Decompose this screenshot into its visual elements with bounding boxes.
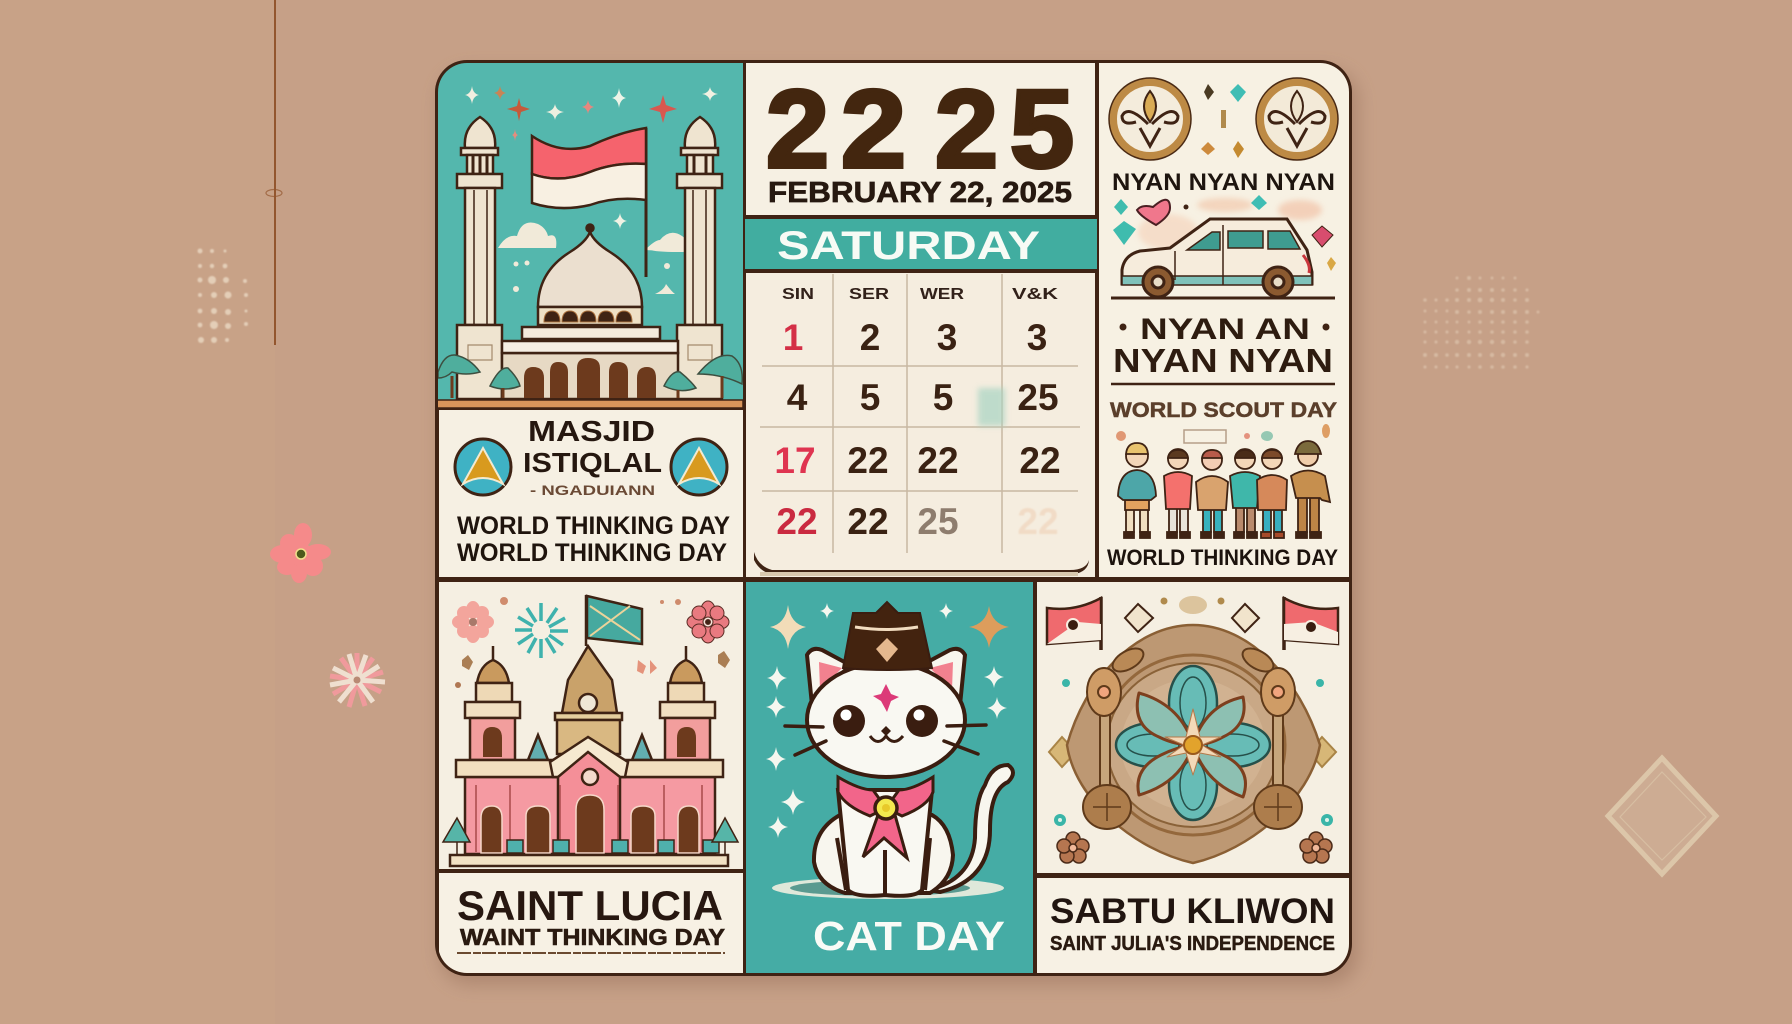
heading: Masjid: MASJID bbox=[528, 416, 655, 448]
icon: mosque dome and hall bbox=[502, 224, 678, 399]
panel: date header bbox=[746, 62, 1095, 215]
main hall bbox=[456, 737, 723, 854]
weekday labels: SER bbox=[849, 286, 890, 303]
icon: cathedral bbox=[443, 646, 738, 866]
day numbers: 2 bbox=[860, 317, 880, 358]
icon: corner flowers bbox=[1057, 832, 1332, 863]
hat bbox=[843, 602, 932, 670]
day numbers: 17 bbox=[774, 440, 816, 481]
clouds bbox=[498, 222, 702, 294]
teal pedestals bbox=[507, 840, 719, 853]
day numbers bbox=[774, 317, 1061, 542]
icon: left Saint Lucia badge bbox=[455, 439, 511, 495]
weekday labels: WER bbox=[920, 286, 965, 303]
big number 2225: 2 bbox=[935, 68, 998, 191]
panel: Masjid Istiqlal text bbox=[439, 410, 743, 577]
calendar sheet curl bbox=[754, 552, 1089, 576]
day numbers: 1 bbox=[783, 317, 803, 358]
confetti top bbox=[1201, 84, 1246, 158]
label: Cat Day: CAT DAY bbox=[813, 913, 1005, 959]
day numbers: 22 bbox=[847, 501, 889, 542]
icon: small ornaments bbox=[455, 597, 730, 688]
day numbers: 3 bbox=[937, 317, 957, 358]
ground line bbox=[1111, 296, 1335, 300]
icon: right minaret bbox=[677, 117, 722, 399]
left tower bbox=[465, 646, 520, 760]
centre clock tower bbox=[528, 646, 652, 760]
whiskers bbox=[785, 725, 986, 755]
weekday labels: SIN bbox=[782, 286, 814, 303]
day numbers: 3 bbox=[1027, 317, 1047, 358]
scout 6 bbox=[1291, 441, 1330, 538]
panel: Sabtu Kliwon text bbox=[1037, 878, 1351, 975]
label: World Thinking Day line 1: WORLD THINKING DAY bbox=[457, 512, 730, 540]
ground patch bbox=[772, 877, 1004, 899]
label: Nyan Nyan: NYAN NYAN bbox=[1113, 342, 1333, 379]
base steps bbox=[450, 855, 728, 866]
icon: bronze medallion bbox=[1067, 625, 1320, 863]
icon: Indonesian flag bbox=[532, 128, 646, 277]
scarf bbox=[838, 777, 886, 816]
day numbers: 5 bbox=[933, 377, 953, 418]
day numbers: 4 bbox=[787, 377, 808, 418]
icon: left scout emblem bbox=[1109, 78, 1191, 160]
day numbers: 25 bbox=[1017, 377, 1059, 418]
smudged confetti row bbox=[1116, 424, 1330, 443]
heading: Sabtu Kliwon: SABTU KLIWON bbox=[1050, 892, 1335, 931]
icon: mosque trees bbox=[438, 355, 742, 398]
panel: Sabtu Kliwon illustration bbox=[1037, 582, 1351, 873]
icon: left flag bbox=[1047, 597, 1101, 650]
panel: Cat Day bbox=[746, 582, 1033, 974]
right tower bbox=[660, 646, 715, 760]
scouts group bbox=[1118, 441, 1330, 538]
sparkles bbox=[766, 603, 1009, 838]
big number 2225: 5 bbox=[1010, 68, 1074, 191]
ears bbox=[807, 649, 850, 705]
panel: Saint Lucia illustration bbox=[439, 582, 743, 869]
divider line bbox=[1111, 383, 1335, 385]
icon: cat mascot bbox=[785, 602, 1013, 896]
label: Nyan An: NYAN AN bbox=[1140, 313, 1310, 346]
arches bbox=[481, 795, 699, 853]
underline bbox=[457, 952, 725, 954]
icon: car bbox=[1122, 219, 1312, 297]
day numbers: 5 bbox=[860, 377, 880, 418]
weekday labels bbox=[782, 288, 1058, 299]
trees bbox=[443, 818, 738, 856]
icon: right scout emblem bbox=[1256, 78, 1338, 160]
panel: Masjid Istiqlal illustration bbox=[436, 62, 743, 408]
label: Nyan Nyan Nyan: NYAN NYAN NYAN bbox=[1112, 169, 1335, 196]
calendar card bbox=[435, 60, 1352, 976]
day numbers: 22 bbox=[776, 501, 818, 542]
teal beads bbox=[1054, 679, 1333, 826]
day numbers: 22 bbox=[917, 440, 959, 481]
head bbox=[807, 663, 965, 777]
scout 2 bbox=[1164, 449, 1192, 538]
heading: Istiqlal: ISTIQLAL bbox=[523, 447, 662, 478]
panel: Scout column bbox=[1099, 62, 1351, 577]
label: Nyan An bbox=[1120, 318, 1330, 339]
forehead mark bbox=[873, 684, 899, 712]
card shadow bbox=[440, 70, 1358, 984]
subheading: SAINT JULIA'S INDEPENDENCE bbox=[1050, 933, 1335, 955]
day numbers: 22 bbox=[1019, 440, 1061, 481]
icon: pink flower bbox=[270, 523, 331, 583]
panel: Saturday bar bbox=[745, 219, 1097, 269]
scout 3 bbox=[1196, 450, 1228, 538]
heading: Saint Lucia: SAINT LUCIA bbox=[457, 882, 723, 929]
label: World Scout Day: WORLD SCOUT DAY bbox=[1110, 399, 1337, 422]
tail bbox=[928, 765, 1013, 892]
grid lines bbox=[760, 274, 1080, 553]
day numbers: 25 bbox=[917, 501, 959, 542]
big number 2225: 2 bbox=[841, 68, 906, 191]
icon: right flower bbox=[687, 601, 729, 643]
day numbers: 22 bbox=[1017, 501, 1059, 542]
label: World Thinking Day line 2: WORLD THINKING DAY bbox=[457, 539, 727, 567]
day numbers: 22 bbox=[847, 440, 889, 481]
panel: month grid bbox=[746, 273, 1095, 577]
background: hanging thread bbox=[266, 0, 282, 345]
icon: ornament diamonds bbox=[1049, 596, 1336, 767]
scout 5 bbox=[1257, 449, 1287, 538]
background: faint dot grid left bbox=[198, 248, 248, 343]
nose and mouth bbox=[881, 726, 891, 736]
icon: left flower bbox=[452, 601, 494, 643]
label: World Thinking Day: WORLD THINKING DAY bbox=[1107, 545, 1338, 570]
teal smudge bbox=[978, 388, 1005, 426]
weekday labels: V&K bbox=[1012, 286, 1059, 303]
icon: ornate pillars bbox=[1083, 644, 1302, 829]
body bbox=[814, 815, 953, 893]
eyes bbox=[833, 705, 865, 737]
panel: Saturday bar: SATURDAY bbox=[777, 224, 1040, 268]
subheading: WAINT THINKING DAY bbox=[460, 924, 725, 950]
icon: striped paper rosette bbox=[330, 653, 385, 707]
panel: Saint Lucia text bbox=[439, 873, 743, 975]
decorations around car bbox=[1113, 195, 1336, 271]
big number 2225: 2 bbox=[766, 68, 829, 191]
icon: embossed diamond bbox=[1608, 758, 1716, 874]
orange ledge bbox=[436, 400, 743, 408]
big number 2225 bbox=[768, 88, 1073, 170]
scout 1 bbox=[1118, 443, 1156, 538]
icon: right Saint Lucia badge bbox=[671, 439, 727, 495]
icon: left minaret bbox=[457, 117, 502, 399]
icon: teal firework bbox=[515, 603, 568, 658]
sparkles bbox=[465, 86, 718, 229]
scout 4 bbox=[1230, 449, 1260, 538]
icon: Saint Lucia flag bbox=[586, 595, 642, 646]
small caption: - NGADUIANN bbox=[530, 482, 655, 498]
icon: right flag bbox=[1284, 597, 1338, 650]
date line: FEBRUARY 22, 2025 bbox=[768, 177, 1072, 209]
icon: teal flower bbox=[1116, 666, 1270, 820]
background: faint dot grid right bbox=[1423, 276, 1540, 369]
